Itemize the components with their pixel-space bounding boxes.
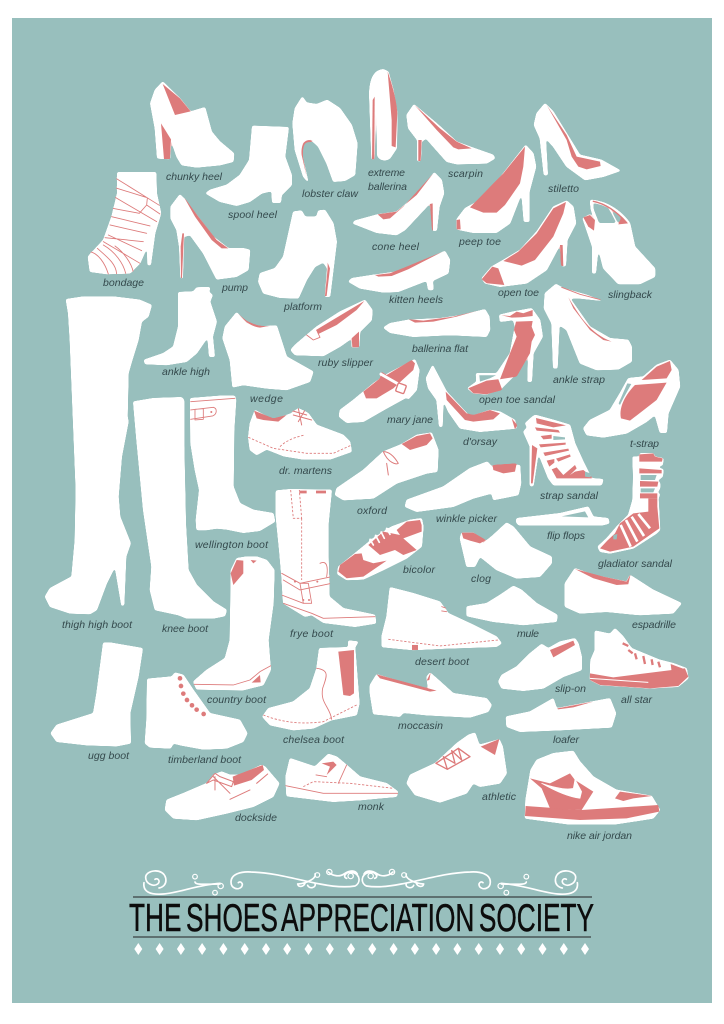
shoe: t-strap: t-strap [630,438,659,450]
shoe: platform [258,210,337,313]
shoe: open toe [482,201,576,299]
shoe: all star [590,628,688,706]
shoe: ballerina flat: ballerina flat [412,343,469,355]
shoe: winkle picker: winkle picker [436,513,498,525]
shoe: stiletto [534,103,621,195]
shoe: mary jane: mary jane [387,414,433,426]
shoe: dockside: dockside [235,812,277,824]
shoe: slingback [583,201,655,301]
shoe: clog: clog [471,573,491,585]
shoe: oxford [335,433,438,517]
shoe: ankle strap: ankle strap [553,374,605,386]
shoe: knee boot: knee boot [162,623,209,635]
shoe: open toe sandal: open toe sandal [479,394,556,406]
shoe: chelsea boot [262,641,359,746]
shoe: nike air jordan: nike air jordan [567,830,632,842]
shoe: country boot: country boot [207,694,267,706]
shoe: ruby slipper: ruby slipper [318,357,374,369]
shoe: timberland boot [145,673,247,766]
shoe: open toe: open toe [498,287,539,299]
shoe: bondage: bondage [103,277,144,289]
shoe: mule: mule [517,628,539,640]
shoe: flip flops: flip flops [547,530,586,542]
shoe: ugg boot [51,643,143,762]
shoe: strap sandal [523,415,603,502]
shoe: flip flops [516,507,609,542]
shoe: athletic [407,733,517,803]
shoe: bondage [88,172,161,289]
shoe: wedge: wedge [250,393,283,405]
shoe: scarpin: scarpin [448,168,483,180]
shoe: knee boot [133,397,227,635]
shoe: frye boot [276,489,376,640]
shoe: desert boot [382,587,502,668]
shoe: extreme ballerina: extreme [368,167,405,179]
shoe: all star: all star [621,694,652,706]
shoe: bicolor [337,518,436,580]
shoe: platform: platform [283,301,322,313]
shoe: spool heel [206,126,292,221]
shoe: clog [460,523,552,585]
shoe: nike air jordan [525,751,660,842]
shoe: chunky heel [150,82,234,183]
shoe: wellington boot: wellington boot [195,539,269,551]
shoe: kitten heels: kitten heels [389,294,444,306]
shoe: mule [467,586,557,640]
shoe: wellington boot [190,396,275,551]
shoe: ankle high [144,287,217,378]
shoe: ruby slipper [291,300,374,369]
shoe: t-strap [583,360,680,450]
shoe: loafer: loafer [553,734,580,746]
shoe: mary jane [339,359,433,426]
shoe: moccasin: moccasin [398,720,443,732]
shoe: athletic: athletic [482,791,517,803]
shoe: scarpin [407,104,495,180]
shoe: bicolor: bicolor [403,564,436,576]
shoe: cone heel: cone heel [372,241,420,253]
shoe: open toe sandal [467,308,556,406]
title rule: bottom [133,936,591,938]
shoe: ankle high: ankle high [162,366,210,378]
shoe: espadrille: espadrille [632,619,676,631]
shoe: d'orsay: d'orsay [463,436,498,448]
shoe: slingback: slingback [608,289,653,301]
shoe: monk: monk [358,801,385,813]
shoe: lobster claw: lobster claw [302,188,359,200]
shoe: spool heel: spool heel [228,209,278,221]
title ornament: flourish [144,869,577,895]
shoe: slip-on: slip-on [555,683,586,695]
shoe: peep toe [457,145,536,248]
title rule: top [133,896,592,898]
shoe: stiletto: stiletto [548,183,579,195]
shoe: espadrille [565,568,682,631]
shoe: d'orsay [426,365,517,448]
shoe: timberland boot: timberland boot [168,754,242,766]
shoe collection [45,69,688,842]
shoe: slip-on [498,638,586,695]
shoe: ankle strap [544,284,632,386]
shoe: monk [286,754,398,813]
shoe: pump: pump [221,282,248,294]
shoe: ugg boot: ugg boot [88,750,130,762]
shoe: extreme ballerina [368,69,407,193]
shoe: winkle picker [405,462,521,525]
shoe: thigh high boot [45,297,152,631]
diamond row [134,943,589,955]
shoe: dockside [165,765,279,824]
shoe: chelsea boot: chelsea boot [283,734,345,746]
shoe: thigh high boot: thigh high boot [62,619,133,631]
shoe: moccasin [370,673,492,732]
shoe: pump [171,194,250,294]
shoe: oxford: oxford [357,505,388,517]
shoe: lobster claw [293,97,359,200]
shoe: extreme ballerina: ballerina [368,181,407,193]
shoe: kitten heels [348,251,450,306]
shoe: country boot [193,557,274,706]
shoe: chunky heel: chunky heel [166,171,223,183]
shoe: dr. martens: dr. martens [279,465,333,477]
shoe: strap sandal: strap sandal [540,490,599,502]
shoe: dr. martens [248,408,352,477]
shoe: wedge [223,312,313,405]
shoe: desert boot: desert boot [415,656,470,668]
shoe: gladiator sandal [598,453,673,570]
shoe: cone heel [353,172,444,253]
shoe: ballerina flat [383,309,490,355]
shoe: peep toe: peep toe [458,236,501,248]
shoe: loafer [506,698,616,746]
shoe: frye boot: frye boot [290,628,334,640]
shoe: gladiator sandal: gladiator sandal [598,558,673,570]
